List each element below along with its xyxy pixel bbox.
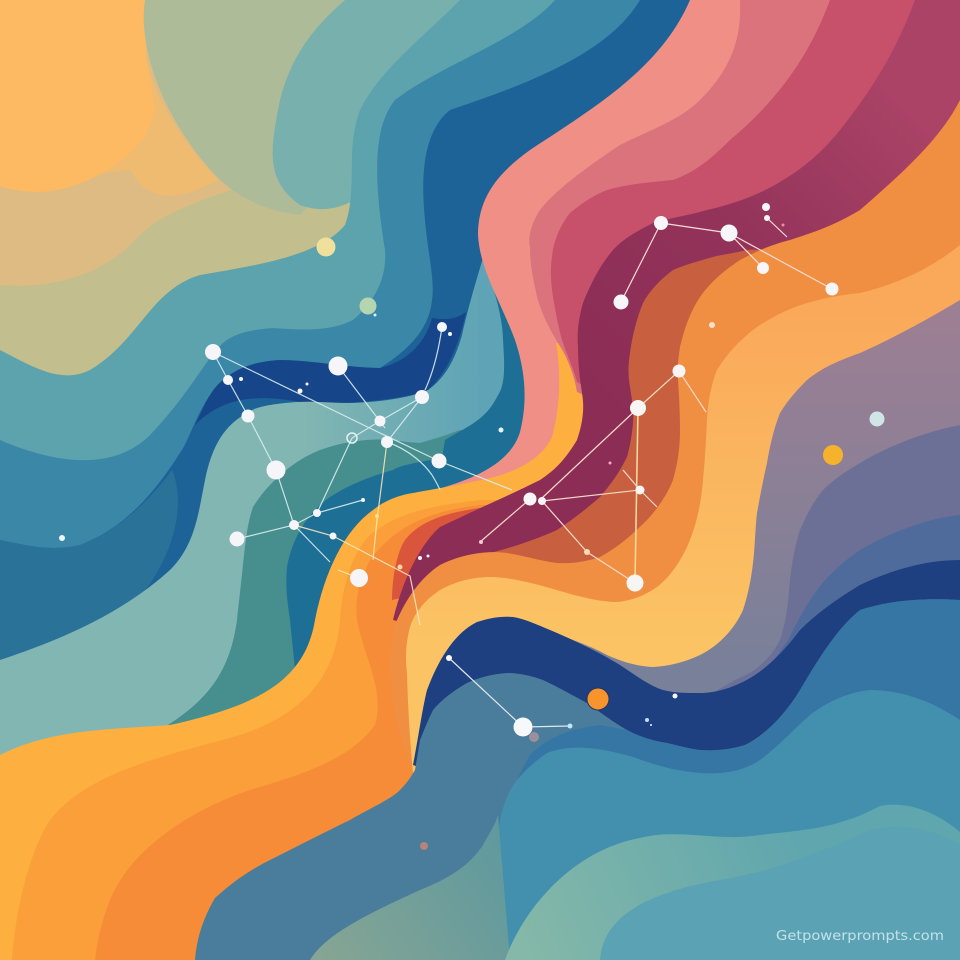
star nodes: upper right	[614, 203, 838, 328]
watermark: Getpowerprompts.com	[776, 929, 944, 944]
panel: golden orange waves	[0, 343, 960, 960]
planet: pale yellow	[316, 238, 336, 256]
panel: navy wave	[413, 560, 960, 960]
dot: white left	[59, 535, 65, 541]
constellation lines: left	[213, 327, 512, 625]
planet: pale blue	[870, 412, 884, 426]
constellation: bottom navy	[446, 655, 678, 742]
planet: gold	[823, 445, 843, 465]
panel: blue hills bottom	[195, 599, 960, 960]
constellation: centre right	[479, 364, 706, 592]
star nodes: centre right	[479, 364, 686, 592]
constellation: upper right	[614, 203, 838, 328]
constellation lines: upper right	[621, 218, 832, 302]
constellation lines: centre right	[480, 371, 706, 583]
panel: rose and crimson waves	[393, 0, 960, 700]
grey dot	[529, 732, 539, 742]
planet: pale green	[360, 298, 376, 314]
dot: small teal	[374, 314, 376, 316]
panel: brick and orange waves	[390, 100, 960, 960]
panel: salmon wave	[435, 0, 960, 960]
panel: purple and slate waves	[400, 300, 960, 960]
planet: orange	[587, 688, 609, 710]
coloured planets and loose dots	[59, 238, 884, 850]
star nodes: bottom navy	[446, 655, 678, 736]
constellation: left cluster	[205, 322, 512, 625]
dot: clay	[420, 842, 428, 850]
constellation lines: bottom navy	[449, 658, 570, 727]
star nodes: left	[205, 322, 452, 587]
dot: white centre	[498, 428, 504, 432]
